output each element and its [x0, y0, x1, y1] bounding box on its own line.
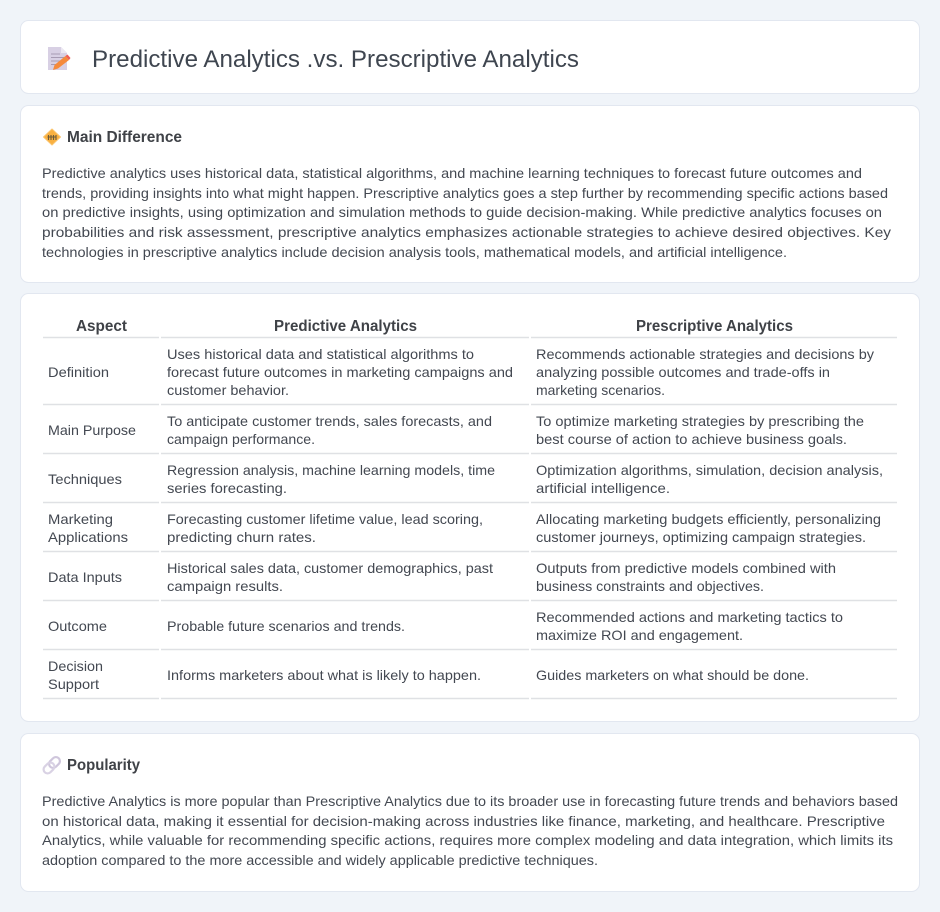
row: outcome: Recommended actions and marketing tactics to [536, 609, 843, 625]
row: outcome: Probable future scenarios and trends. [167, 618, 405, 634]
row: marketing applications: Applications [48, 529, 128, 545]
panel: header [20, 20, 920, 94]
row: decision support: Guides marketers on what should be done. [536, 667, 809, 683]
row: data inputs [43, 560, 897, 600]
row: definition [43, 346, 897, 404]
row: marketing applications: Allocating marketing budgets efficiently, personalizing [536, 511, 881, 527]
row: outcome: maximize ROI and engagement. [536, 627, 743, 643]
row: decision support: Support [48, 676, 99, 692]
icon: chain link [42, 755, 62, 775]
row: techniques: series forecasting. [167, 480, 287, 496]
row: marketing applications: customer journeys, optimizing campaign strategies. [536, 529, 866, 545]
row: marketing applications: predicting churn rates. [167, 529, 316, 545]
row: definition: marketing scenarios. [536, 382, 665, 398]
row: data inputs: Historical sales data, customer demographics, past [167, 560, 493, 576]
text block: main difference: Predictive analytics uses historical data, statistical algorithms, and machine learning techniques to forecast future outcomes and [42, 165, 862, 181]
icon: warning diamond [44, 129, 60, 145]
panel: comparison table [20, 294, 920, 722]
row: outcome [43, 609, 897, 650]
row: definition: forecast future outcomes in marketing campaigns and [167, 364, 513, 380]
panel: main difference [20, 106, 920, 282]
text block: popularity: on historical data, making it essential for decision-making across industries like finance, marketing, and healthcare. Prescriptive [42, 813, 885, 829]
row: outcome: Outcome [48, 618, 107, 634]
row: techniques: Optimization algorithms, simulation, decision analysis, [536, 462, 883, 478]
text block: main difference: on predictive insights, using optimization and simulation methods to guide decision-making. While predictive analytics focuses on [42, 204, 882, 220]
text block: popularity: Analytics, while valuable for recommending specific actions, requires more complex modeling and data integration, which limits its [42, 832, 893, 848]
text block: main difference: probabilities and risk assessment, prescriptive analytics emphasizes actionable strategies to achieve desired objectives. Key [42, 224, 891, 240]
row: main purpose [43, 413, 897, 454]
row: data inputs: campaign results. [167, 578, 283, 594]
row: definition: Definition [48, 364, 109, 380]
row: techniques: artificial intelligence. [536, 480, 670, 496]
row: main purpose: best course of action to achieve business goals. [536, 431, 847, 447]
row: marketing applications [43, 511, 897, 552]
text block: popularity [42, 793, 898, 868]
row: decision support: Decision [48, 658, 103, 674]
heading: popularity: Popularity [67, 757, 140, 774]
row: definition: Recommends actionable strategies and decisions by [536, 346, 874, 362]
row: techniques [43, 462, 897, 502]
row: main purpose: To anticipate customer trends, sales forecasts, and [167, 413, 492, 429]
row: techniques: Techniques [48, 471, 122, 487]
row: main purpose: campaign performance. [167, 431, 315, 447]
icon: document with pencil [48, 47, 70, 70]
table header: Aspect [76, 318, 128, 335]
row: marketing applications: Marketing [48, 511, 113, 527]
row: main purpose: To optimize marketing strategies by prescribing the [536, 413, 864, 429]
text block: main difference: technologies in prescriptive analytics include decision analysis tools, mathematical models, and artificial intelligence. [42, 244, 787, 260]
heading: main difference: Main Difference [67, 129, 182, 146]
row: data inputs: Outputs from predictive models combined with [536, 560, 836, 576]
row: data inputs: Data Inputs [48, 569, 122, 585]
row: techniques: Regression analysis, machine learning models, time [167, 462, 495, 478]
text block: popularity: Predictive Analytics is more popular than Prescriptive Analytics due to its broader use in forecasting future trends and behaviors based [42, 793, 898, 809]
row: marketing applications: Forecasting customer lifetime value, lead scoring, [167, 511, 483, 527]
table header: Predictive Analytics [274, 318, 417, 335]
row: definition: Uses historical data and statistical algorithms to [167, 346, 474, 362]
row: main purpose: Main Purpose [48, 422, 136, 438]
row: data inputs: business constraints and objectives. [536, 578, 764, 594]
text block: main difference: trends, providing insights into what might happen. Prescriptive analytics goes a step further by recommending specific actions based [42, 185, 888, 201]
text block: main difference [42, 165, 891, 260]
table header: Prescriptive Analytics [636, 318, 793, 335]
row: decision support: Informs marketers about what is likely to happen. [167, 667, 481, 683]
text block: popularity: adoption compared to the more accessible and widely applicable predictive techniques. [42, 852, 598, 868]
title: Predictive Analytics .vs. Prescriptive Analytics [92, 46, 579, 73]
row: definition: analyzing possible outcomes and trade-offs in [536, 364, 830, 380]
table header [43, 318, 897, 338]
panel: popularity [20, 734, 920, 892]
row: definition: customer behavior. [167, 382, 289, 398]
row: decision support [43, 658, 897, 698]
